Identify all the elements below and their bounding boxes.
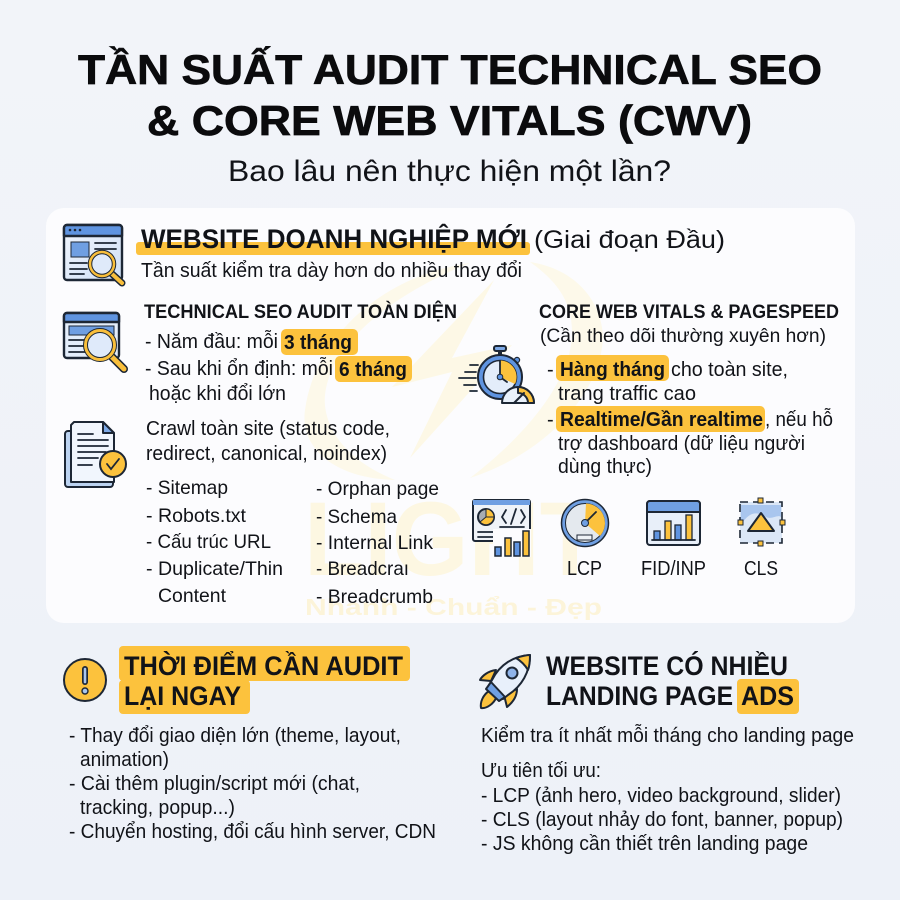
text block: cwv schedule: Hàng tháng [560,359,665,381]
icon: rocket [480,655,530,708]
heading: landing page ads [546,650,799,714]
metric: FID/INP [641,501,706,580]
checklist column 1: - Cấu trúc URL [146,531,271,553]
checklist column 2: - Breadcrumb [316,586,433,608]
icon: website search [64,225,122,283]
metric: FID/INP: FID/INP [641,558,706,580]
checklist column 2: - Breadcraı [316,558,409,580]
checklist column 2: - Schema [316,506,397,528]
checklist column 1: - Robots.txt [146,505,247,527]
icon: dashboard report [473,500,531,557]
heading: core web vitals: CORE WEB VITALS & PAGESPEED [539,302,839,323]
text block: technical audit schedule: - Năm đầu: mỗi [145,330,278,353]
text block: landing page priorities: - JS không cần thiết trên landing page [481,833,808,855]
text block: triggers: - Cài thêm plugin/script mới (chat, [69,773,360,795]
text block: cwv schedule: Realtime/Gần realtime [560,409,763,431]
checklist column 1: Content [158,585,227,607]
checklist column 1: - Sitemap [146,477,228,499]
text block: crawl: Crawl toàn site (status code, [146,418,390,440]
icon: warning [64,659,106,701]
checklist column 2: - Orphan page [316,478,439,500]
text block: cwv schedule [547,355,833,478]
icon: document check [65,422,126,487]
panel: website có nhiều landing page ads [480,650,854,855]
text block: triggers: animation) [80,749,169,771]
checklist column 2 [316,478,439,608]
text block: cwv schedule: cho toàn site, [671,359,788,381]
text block: triggers [69,725,436,843]
heading: website doanh nghiệp mới [136,223,725,255]
text block: triggers: - Chuyển hosting, đổi cấu hình server, CDN [69,821,436,843]
text block: cwv schedule: , nếu hỗ [765,408,833,431]
title [78,46,822,144]
panel: thời điểm cần audit lại ngay [64,646,436,843]
heading: core web vitals: (Cần theo dõi thường xuyên hơn) [540,325,826,347]
text block: landing page priorities: - LCP (ảnh hero, video background, slider) [481,785,841,807]
heading: landing page ads: ADS [741,681,794,711]
panel: website doanh nghiệp mới [46,208,855,623]
heading: landing page ads: WEBSITE CÓ NHIỀU [546,650,788,681]
text block: technical audit schedule: 3 tháng [284,332,352,354]
title: & CORE WEB VITALS (CWV) [147,97,752,144]
checklist column 1: - Duplicate/Thin [146,558,283,580]
text block: landing page priorities: Ưu tiên tối ưu: [481,760,601,782]
text: tần suất: Tần suất kiểm tra dày hơn do nhiều thay đổi [141,260,522,282]
text block: cwv schedule: trợ dashboard (dữ liệu người [558,433,805,455]
text block: cwv schedule: dùng thực) [558,456,652,478]
heading: landing page ads: LANDING PAGE [546,681,733,711]
heading: technical seo audit: TECHNICAL SEO AUDIT TOÀN DIỆN [144,301,457,323]
heading: core web vitals [539,302,839,347]
heading: audit now: THỜI ĐIỂM CẦN AUDIT [124,650,403,681]
text block: technical audit schedule: - Sau khi ổn định: mỗi [145,357,333,380]
text block: cwv schedule: - [547,409,554,431]
subtitle: Bao lâu nên thực hiện một lần? [228,155,671,188]
text block: crawl [146,418,390,465]
text block: landing page priorities: Kiểm tra ít nhất mỗi tháng cho landing page [481,724,854,747]
watermark logo: Nhanh - Chuẩn - Đẹp [305,594,602,620]
text block: cwv schedule: trang traffic cao [558,383,696,405]
watermark logo: LIGHT [304,481,600,598]
text block: crawl: redirect, canonical, noindex) [146,443,387,465]
checklist column 2: - Internal Link [316,532,433,554]
metric: LCP [562,500,608,580]
heading: website doanh nghiệp mới: (Giai đoạn Đầu) [534,226,725,254]
text block: triggers: - Thay đổi giao diện lớn (theme, layout, [69,725,401,747]
heading: audit now [119,646,410,714]
text block: technical audit schedule: 6 tháng [339,359,407,381]
text block: triggers: tracking, popup...) [80,797,235,819]
icon: audit browser [64,313,124,369]
text block: landing page priorities: - CLS (layout nhảy do font, banner, popup) [481,809,843,831]
heading: website doanh nghiệp mới: WEBSITE DOANH NGHIỆP MỚI [141,223,527,254]
text block: landing page priorities [481,724,854,855]
metric: LCP: LCP [567,558,602,580]
icon: stopwatch [459,346,534,403]
title: TẦN SUẤT AUDIT TECHNICAL SEO [78,46,822,93]
heading: audit now: LẠI NGAY [124,681,241,711]
text block: cwv schedule: - [547,359,554,381]
text block: technical audit schedule: hoặc khi đổi lớn [149,383,286,405]
checklist column 1 [146,477,283,607]
text block: technical audit schedule [145,329,412,405]
watermark logo [304,262,603,620]
metric: CLS [738,498,785,580]
metric: CLS: CLS [744,558,778,580]
